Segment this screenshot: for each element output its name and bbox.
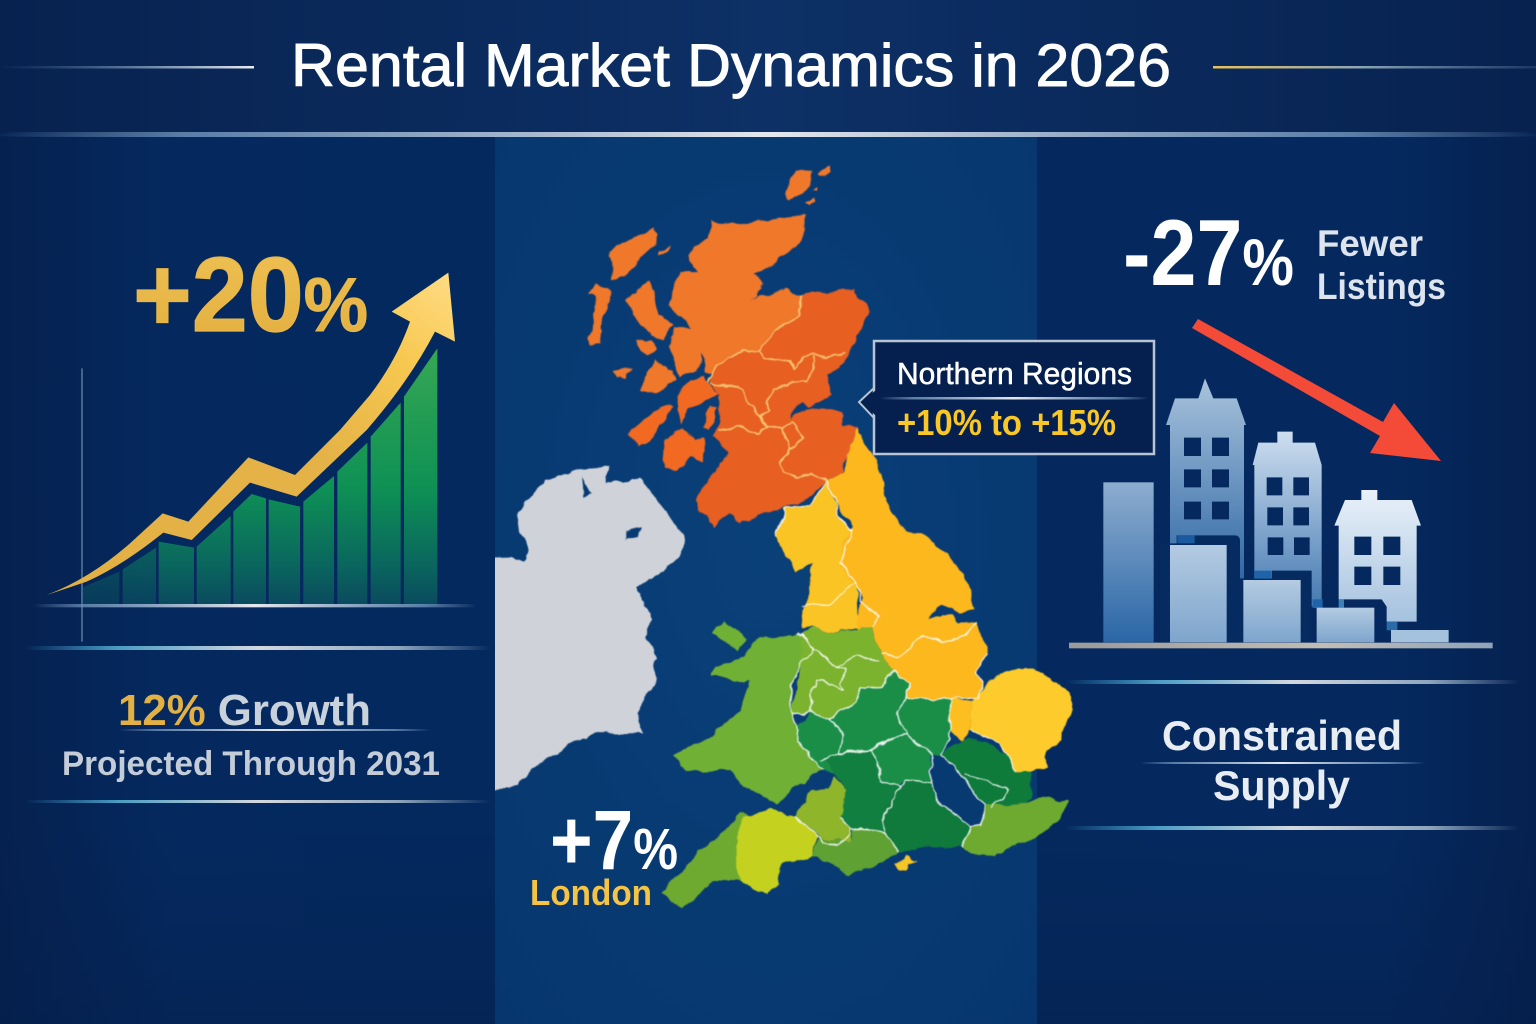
panel: centre map background [495,136,1037,1024]
building: small [1334,490,1421,622]
region: Central England [796,671,952,786]
region: southern Scotland [696,290,870,527]
building: tall [1166,378,1246,580]
heading: constrained supply: Supply [1213,762,1351,809]
callout: Northern Regions: +10% to +15% [897,402,1116,443]
region: Devon [734,810,818,895]
arrow: upward trend [47,273,455,595]
title: Rental Market Dynamics in 2026 [291,32,1171,99]
caption: projected through 2031: Projected Through 2031 [62,745,440,783]
region: Somerset [794,777,851,842]
map: United Kingdom and Ireland [475,167,1073,908]
panel: constrained supply [1065,200,1520,830]
map: England and Wales [660,430,1073,908]
label: fewer listings [1317,223,1446,307]
stat: 12% growth: 12% Growth [118,686,371,735]
region: East Anglia [970,670,1073,770]
region: Cornwall [660,812,748,908]
region: North West [776,482,859,633]
region: Dorset [811,828,899,873]
heading: constrained supply [1162,712,1402,809]
heading: constrained supply: Constrained [1162,712,1402,759]
chart bars [83,348,437,605]
callout: Northern Regions: Northern Regions [897,356,1132,391]
stat: +20%: +20% [133,236,368,354]
region: Wales [675,622,824,805]
bar chart with rising arrow [33,273,477,642]
region borders [776,482,1015,852]
callout: Northern Regions [859,341,1154,454]
region: Isle of Wight [895,855,920,871]
stat: -27%: -27% [1123,200,1294,305]
map: Ireland [475,467,684,790]
building: middle [1253,432,1322,607]
label: London: London [530,872,652,913]
region: North East and Yorkshire [828,430,987,700]
label: fewer listings: Fewer [1317,223,1423,264]
region: South Central [883,780,970,853]
label: fewer listings: Listings [1317,266,1446,307]
region: Midlands [792,625,893,717]
buildings [1069,378,1493,648]
stat: +7% London [530,793,678,913]
region: East and London [941,737,1032,807]
panel: growth [25,236,491,803]
region: South East [962,798,1067,858]
region borders [707,297,845,482]
map: Scotland [581,167,870,538]
arrow: downward trend [1192,319,1441,461]
stat: +7% London: +7% [550,793,678,887]
